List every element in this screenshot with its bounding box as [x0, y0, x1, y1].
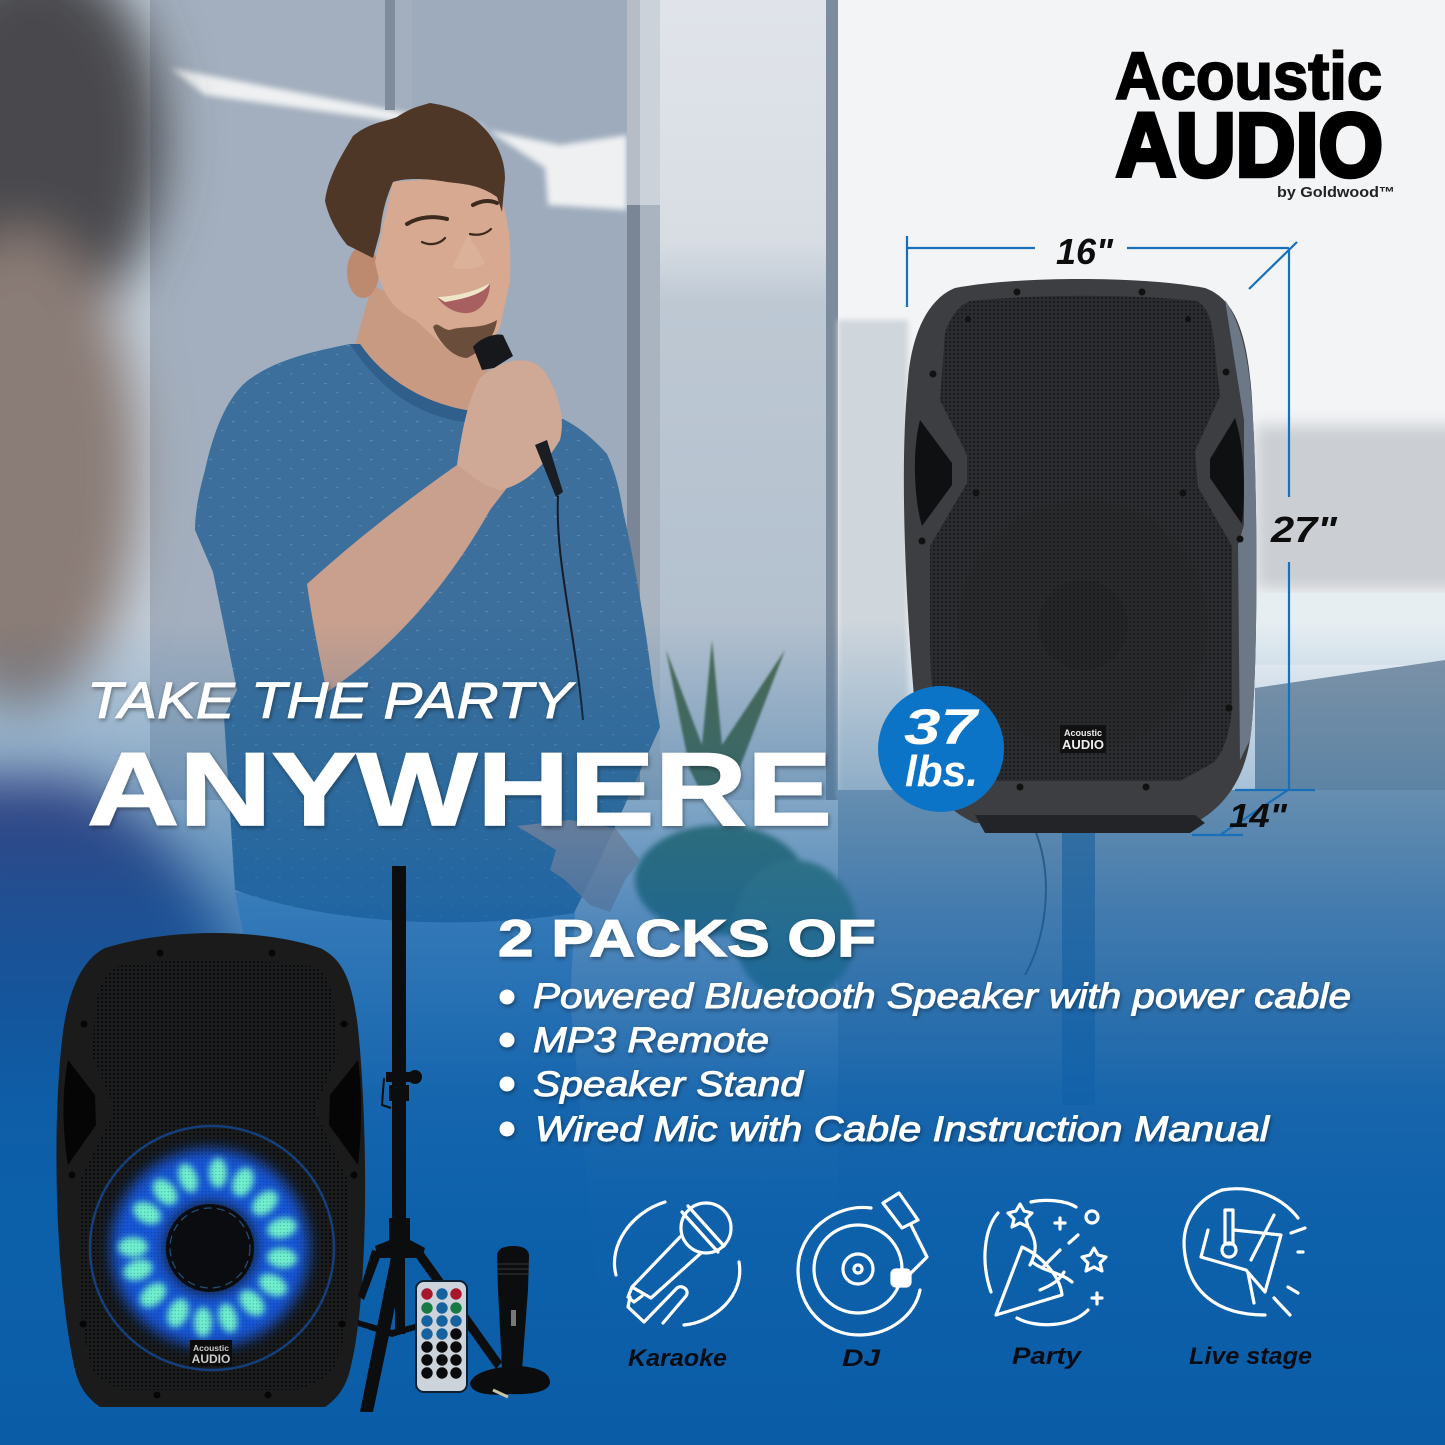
neck: [355, 285, 495, 420]
logo word: Acoustic: Acoustic: [1115, 39, 1382, 114]
logo: [1115, 39, 1395, 201]
headline line 2: ANYWHERE: [87, 732, 832, 848]
shirt: [195, 344, 660, 922]
fist: [457, 360, 562, 490]
dimension labels: 16": [1056, 231, 1114, 272]
LED glow: [138, 1176, 282, 1320]
packing list: [498, 910, 1351, 1149]
microphone head and handle: [473, 335, 513, 370]
wired microphone: [470, 1246, 550, 1397]
face: [375, 178, 510, 358]
list items: Powered Bluetooth Speaker with power cable: [533, 977, 1351, 1016]
logo byline: by Goldwood™: [1277, 185, 1395, 201]
mouth: [437, 283, 490, 313]
weight badge: 37: [904, 699, 980, 755]
nose: [452, 235, 485, 269]
foreground blurred head and shoulder: [0, 0, 225, 1300]
weight badge: [878, 686, 1004, 812]
dimension labels: 27": [1270, 509, 1338, 550]
list items: Wired Mic with Cable Instruction Manual: [535, 1110, 1270, 1149]
dimension lines: [907, 236, 1315, 835]
icons row: [614, 1189, 1305, 1335]
list items: Speaker Stand: [533, 1065, 805, 1104]
list items: [533, 977, 1351, 1149]
product speaker with LED ring: [56, 933, 365, 1407]
icon captions: DJ: [842, 1345, 881, 1372]
gesturing hand: [517, 820, 640, 912]
weight badge: lbs.: [905, 747, 978, 796]
goatee: [433, 320, 497, 358]
logo word: AUDIO: AUDIO: [1116, 96, 1383, 196]
singer: [195, 103, 660, 1320]
headline: [87, 672, 832, 848]
blue gradient overlay: [0, 620, 1445, 1445]
plant behind singer: [635, 640, 857, 1000]
grille: [930, 296, 1232, 781]
icon captions: [628, 1343, 1312, 1372]
screws: [918, 288, 1244, 790]
wall speaker: [904, 279, 1256, 833]
headline line 1: TAKE THE PARTY: [87, 672, 577, 729]
icon captions: Live stage: [1189, 1343, 1312, 1370]
remote: [416, 1281, 467, 1392]
side handles: [915, 420, 952, 526]
dimension labels: 14": [1229, 797, 1287, 834]
speaker badge: [1060, 725, 1106, 753]
icon: karaoke microphone: [614, 1202, 740, 1325]
icon: live stage spotlight: [1184, 1189, 1305, 1315]
hair: [325, 103, 505, 258]
dimension labels: [1056, 231, 1338, 834]
LED segments: [118, 1158, 299, 1337]
product speaker with LED ring: AUDIO: [192, 1352, 230, 1366]
icon captions: Party: [1012, 1343, 1083, 1370]
wall speaker: AUDIO: [1062, 737, 1104, 752]
icon captions: Karaoke: [628, 1345, 727, 1372]
icon: DJ turntable: [798, 1193, 927, 1335]
wall speaker: Acoustic: [1064, 728, 1102, 738]
list heading: 2 PACKS OF: [498, 910, 876, 968]
product speaker with LED ring: Acoustic: [193, 1343, 229, 1353]
list bullets: [500, 990, 514, 1136]
icon: party popper: [985, 1200, 1106, 1325]
forearm: [307, 465, 513, 692]
jeans: [235, 892, 600, 1320]
brows and eyes: [407, 201, 497, 244]
tripod stand: [358, 866, 502, 1412]
wall speaker stand: [1025, 820, 1095, 1105]
mic cable: [558, 496, 583, 720]
speaker badge: [190, 1340, 232, 1366]
ear: [347, 246, 379, 298]
list items: MP3 Remote: [533, 1021, 769, 1060]
